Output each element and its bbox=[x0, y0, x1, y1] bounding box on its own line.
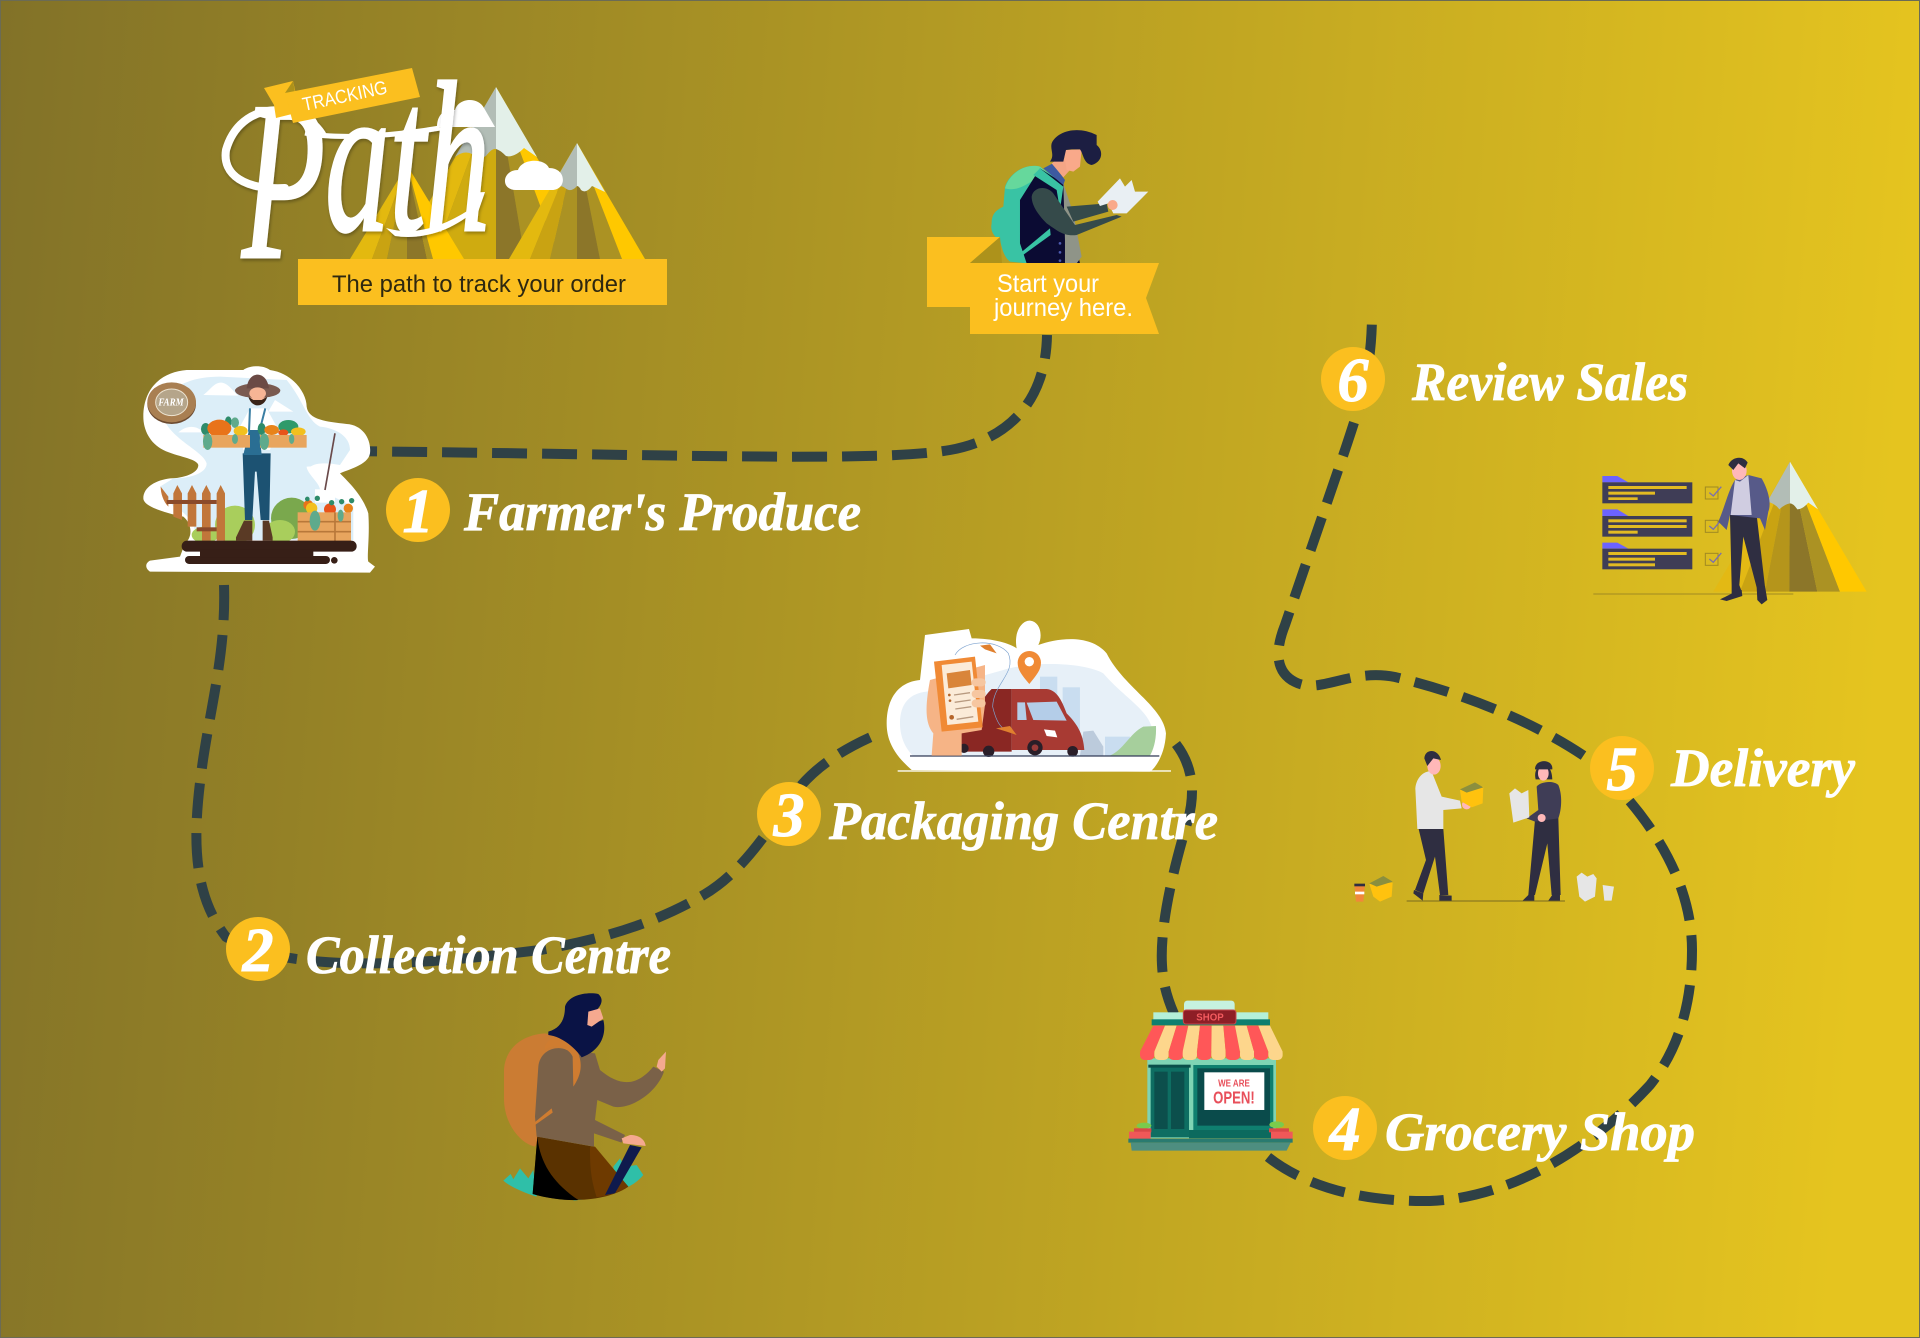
step 1: farmer's produce: Farmer's Produce bbox=[463, 482, 861, 542]
illustration: farmer bbox=[143, 366, 375, 573]
farm sign: FARM bbox=[157, 398, 184, 409]
window with open sign: OPEN! bbox=[1213, 1088, 1255, 1108]
step 4: grocery shop: 4 bbox=[1328, 1096, 1360, 1164]
step 6: review sales bbox=[1321, 347, 1688, 415]
shop sign: SHOP bbox=[1196, 1013, 1224, 1024]
van bbox=[959, 689, 1084, 757]
illustration: collection hiker bbox=[503, 993, 666, 1201]
step 3: packaging centre: Packaging Centre bbox=[828, 791, 1218, 851]
farm sign bbox=[147, 382, 196, 424]
step 2: collection centre: 2 bbox=[242, 917, 274, 985]
hand with phone bbox=[927, 657, 986, 756]
title block: Tracking Path bbox=[226, 40, 667, 307]
ribbon front with text: journey here. bbox=[993, 294, 1133, 322]
held crates bbox=[201, 416, 307, 450]
dashed route path bbox=[196, 313, 1692, 1201]
shovel bbox=[325, 433, 335, 490]
clouds bbox=[437, 100, 563, 190]
step 2: collection centre bbox=[226, 917, 671, 985]
farmer figure bbox=[235, 375, 280, 541]
illustration: delivery people bbox=[1354, 751, 1614, 902]
route line with planes bbox=[955, 643, 1017, 735]
bushes bbox=[192, 498, 312, 544]
ribbon back bbox=[927, 237, 1002, 307]
subtitle banner bbox=[298, 259, 667, 305]
subtitle banner: The path to track your order bbox=[332, 271, 626, 298]
ribbon: tracking: TRACKING bbox=[301, 77, 389, 116]
fence bbox=[161, 485, 225, 541]
woman with bag bbox=[1509, 761, 1561, 901]
illustration: review sales bbox=[1593, 458, 1867, 604]
shop sign bbox=[1183, 1010, 1236, 1024]
location pin bbox=[1018, 651, 1041, 684]
script word: Path: ath bbox=[325, 40, 490, 277]
illustration: packaging centre delivery van bbox=[887, 621, 1171, 772]
ribbon front with text bbox=[970, 263, 1159, 334]
window with open sign: WE ARE bbox=[1218, 1079, 1250, 1090]
step 1: farmer's produce: 1 bbox=[402, 478, 434, 546]
window with open sign bbox=[1189, 1065, 1276, 1138]
folder lists bbox=[1602, 476, 1692, 569]
step 5: delivery: Delivery bbox=[1670, 738, 1856, 798]
step 5: delivery bbox=[1590, 736, 1856, 804]
start: traveller reading map with ribbon bbox=[927, 130, 1159, 334]
step 3: packaging centre: 3 bbox=[772, 782, 804, 850]
mountain bbox=[1713, 462, 1867, 592]
illustration: grocery shop bbox=[1128, 1001, 1293, 1151]
step 5: delivery: 5 bbox=[1606, 736, 1638, 804]
planters and base bbox=[1128, 1121, 1293, 1151]
awning bbox=[1140, 1026, 1283, 1060]
step 4: grocery shop: Grocery Shop bbox=[1385, 1102, 1695, 1162]
step 6: review sales: Review Sales bbox=[1411, 352, 1688, 412]
traveller figure bbox=[991, 130, 1148, 263]
script word: Path: P bbox=[241, 56, 325, 307]
step 6: review sales: 6 bbox=[1338, 347, 1368, 415]
crate with vegetables bbox=[298, 496, 354, 541]
mountains bbox=[350, 87, 645, 259]
standing person bbox=[1718, 458, 1770, 604]
door bbox=[1148, 1065, 1191, 1137]
man with box bbox=[1413, 751, 1483, 901]
small items bbox=[1354, 873, 1614, 902]
check boxes bbox=[1705, 487, 1721, 565]
step 2: collection centre: Collection Centre bbox=[306, 925, 671, 985]
ribbon: tracking bbox=[264, 68, 420, 123]
script word: Path bbox=[226, 40, 490, 307]
ground bbox=[182, 541, 357, 564]
ribbon front with text: Start your bbox=[997, 270, 1099, 298]
